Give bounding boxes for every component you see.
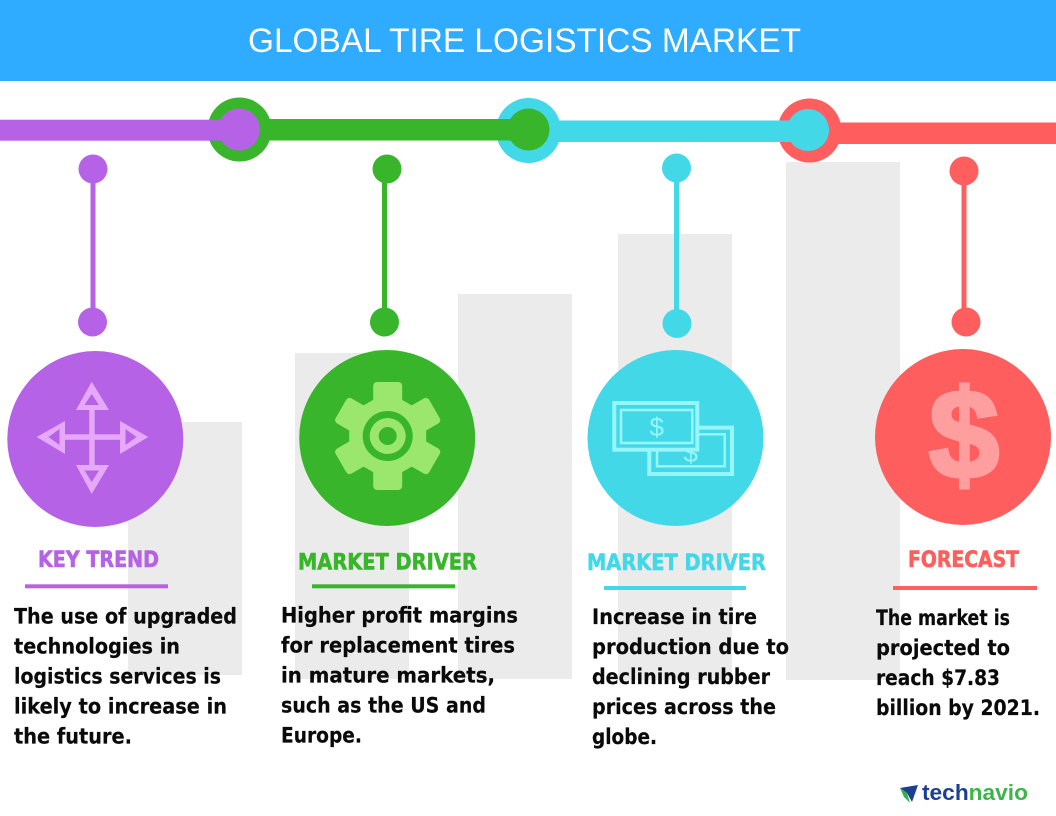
text block: in mature markets, xyxy=(281,664,495,689)
technavio logo: technavio xyxy=(922,780,1028,805)
connector: red xyxy=(950,156,980,336)
text block: logistics services is xyxy=(14,664,221,689)
green circle with gear icon xyxy=(299,350,475,526)
icon: four-way arrows xyxy=(37,382,148,494)
heading: MARKET DRIVER xyxy=(587,551,766,576)
heading: KEY TREND xyxy=(38,548,159,573)
purple circle with arrows icon xyxy=(7,351,183,527)
background stepped gray bars xyxy=(128,162,900,680)
text block: projected to xyxy=(876,636,1010,661)
text block: for replacement tires xyxy=(281,634,515,659)
heading: MARKET DRIVER xyxy=(298,550,477,575)
red circle with dollar icon xyxy=(875,349,1051,525)
text block xyxy=(281,604,518,749)
column 4: forecast xyxy=(876,548,1040,721)
cyan circle with banknotes icon xyxy=(588,350,764,526)
timeline track xyxy=(0,98,1056,163)
text block: Higher profit margins xyxy=(281,604,518,629)
text block: The use of upgraded xyxy=(14,604,237,629)
text block: production due to xyxy=(592,635,789,660)
text block: declining rubber xyxy=(592,665,770,690)
text block: technologies in xyxy=(14,634,180,659)
text block: globe. xyxy=(592,725,657,750)
icon: logo arrow xyxy=(900,785,918,803)
icon: banknotes xyxy=(614,403,732,474)
icon: banknotes: $ xyxy=(649,412,664,442)
text block xyxy=(876,606,1040,721)
connector: purple xyxy=(78,154,108,336)
text block: The market is xyxy=(876,606,1010,631)
column 3: market driver xyxy=(587,551,789,750)
text block: reach $7.83 xyxy=(876,666,1000,691)
column 2: market driver xyxy=(281,550,518,749)
text block: Europe. xyxy=(281,724,362,749)
title: GLOBAL TIRE LOGISTICS MARKET xyxy=(248,22,801,60)
connector: green xyxy=(370,154,402,336)
column 1: key trend xyxy=(14,548,237,749)
heading: FORECAST xyxy=(908,548,1019,573)
icon: banknotes: $ xyxy=(683,438,698,468)
text block: such as the US and xyxy=(281,694,486,719)
text block: Increase in tire xyxy=(592,605,757,630)
header band xyxy=(0,0,1056,81)
text block xyxy=(14,604,237,749)
text block: likely to increase in xyxy=(14,694,227,719)
icon: gear xyxy=(334,382,442,490)
connector: cyan xyxy=(662,154,692,338)
text block: the future. xyxy=(14,724,132,749)
text block xyxy=(592,605,789,750)
text block: prices across the xyxy=(592,695,776,720)
icon: dollar sign: $ xyxy=(929,364,999,505)
